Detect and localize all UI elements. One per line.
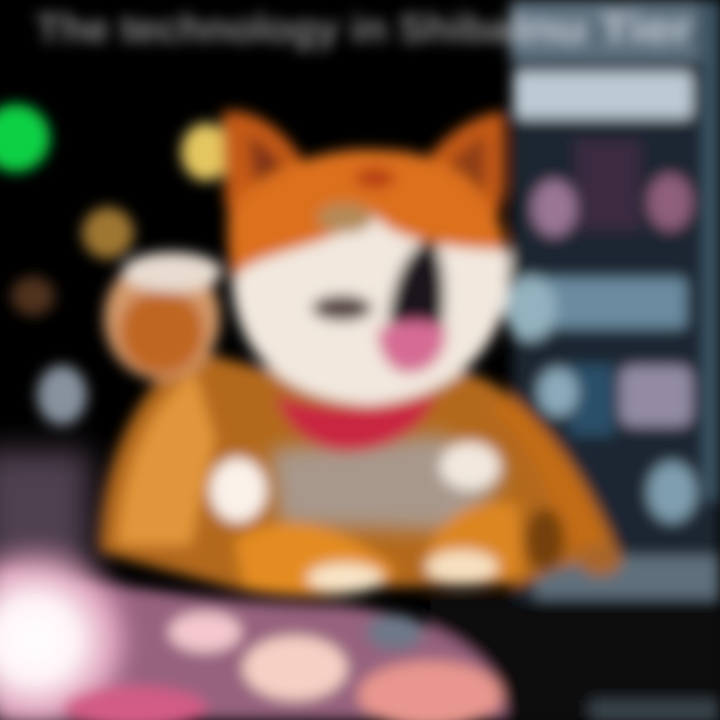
icon: dim coin [11,276,55,316]
icon: green coin [0,104,50,172]
icon: pale coin [37,365,87,425]
head fur [228,149,507,405]
screen tile: light blue [538,368,578,416]
screen row: blue band [520,278,686,328]
light burst: bottom left [0,535,505,720]
tongue [378,321,446,373]
dog inner shadow [525,508,565,572]
brow markings [317,203,373,233]
right ear [430,112,505,245]
icon: amber coin [82,207,134,259]
dog right shoulder shade [490,395,610,552]
title: The technology in Shiba [36,7,511,51]
right paw [425,503,522,585]
panel: trading screen [504,0,720,610]
title: Inu Tier [510,7,692,51]
far paw [578,544,622,576]
white patch right [440,442,500,490]
icon: yellow coin [181,123,231,181]
dog left side highlight [118,372,215,545]
lower left haze [0,450,90,570]
white patch left [210,458,266,522]
open mouth [388,238,444,330]
desk: dark surface [430,556,720,720]
screen row: top label [514,72,692,118]
screen tile: round blue [648,462,696,522]
dog chest [270,435,505,530]
muzzle shade [312,295,372,321]
collar [275,392,435,452]
screen tile: pink left [532,180,576,236]
screen tile: pink right [648,174,692,230]
left paw [235,523,395,596]
face white [232,215,510,405]
screen tile: left light [504,276,556,340]
dog body [100,350,618,590]
left ear [222,111,305,250]
dog tail [104,252,222,380]
dog [100,111,622,596]
screen tile: lilac [620,366,692,426]
screen tile: blue [570,365,614,435]
